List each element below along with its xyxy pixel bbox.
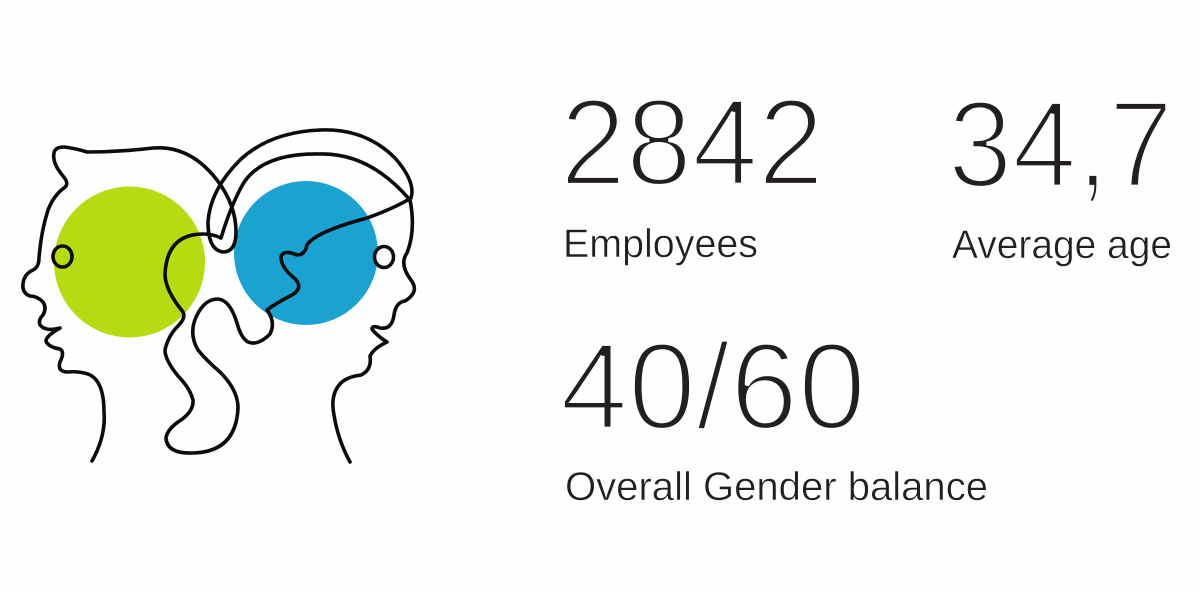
stat: average age: [948, 77, 1173, 267]
continuous line drawing of two heads: [23, 130, 414, 462]
number: 34,7: 34,7: [948, 77, 1173, 214]
label: Overall Gender balance: Overall Gender balance: [565, 465, 988, 509]
blue circle: [234, 181, 378, 325]
label: Employees: Employees: [563, 222, 758, 266]
number: 40/60: 40/60: [560, 319, 866, 456]
green circle: [54, 186, 205, 338]
number: 2842: 2842: [560, 75, 824, 212]
right eye: [374, 246, 394, 268]
left eye: [53, 246, 72, 267]
stat: gender balance: [560, 319, 988, 509]
stat: employees: [560, 75, 824, 266]
label: Average age: Average age: [952, 223, 1172, 267]
illustration: two heads in profile: [23, 130, 414, 462]
